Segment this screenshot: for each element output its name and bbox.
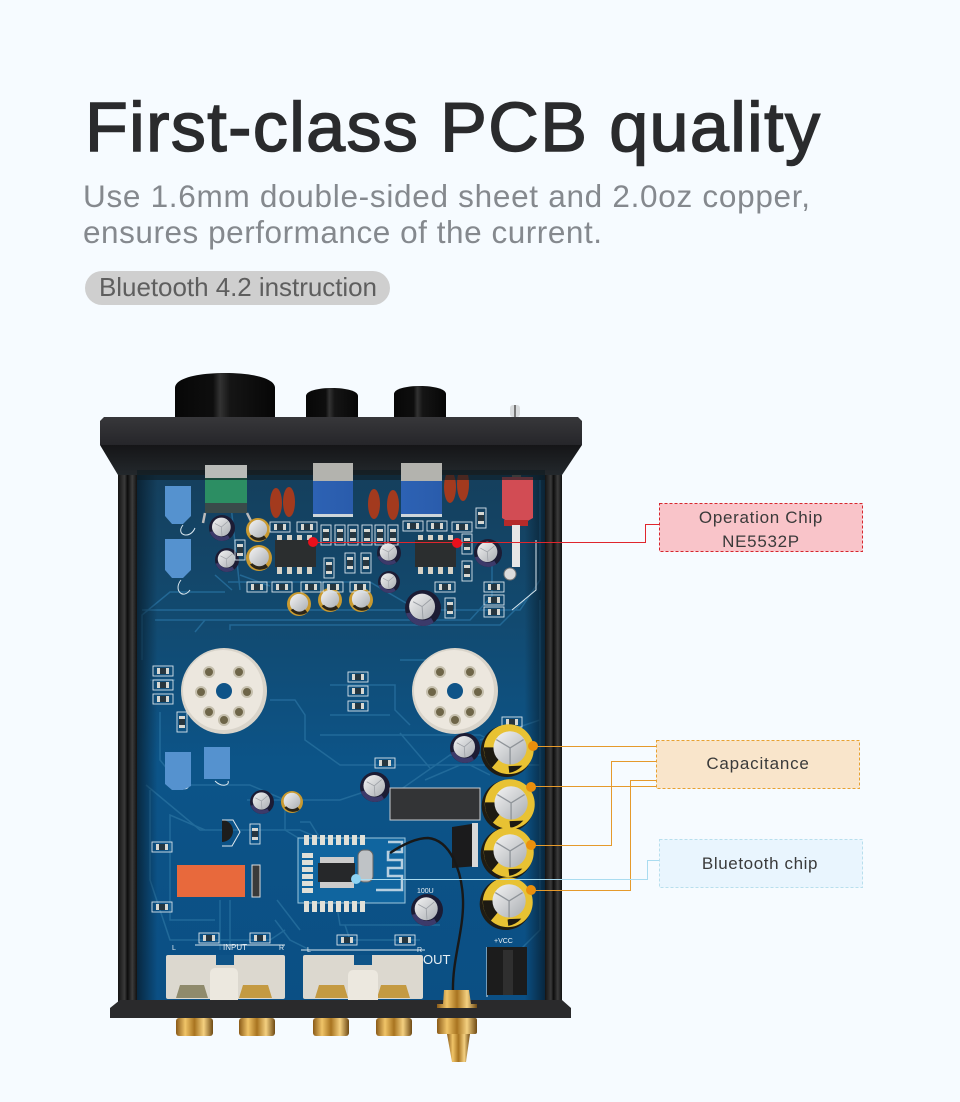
PCB silk labels: R: [417, 947, 422, 954]
bluetooth module: [298, 835, 405, 912]
PCB silk labels: L: [307, 947, 311, 954]
knobs: [175, 373, 520, 417]
label: Operation Chip NE5532P: [660, 504, 862, 552]
vacuum tube sockets: [181, 648, 498, 734]
red capacitors: [270, 464, 495, 520]
connector: op-amp chips to label: [308, 524, 660, 548]
PCB board: [137, 470, 545, 1005]
orange relay: [177, 865, 245, 897]
potentiometer tops over plate shadow: [205, 463, 442, 481]
black heat sink parts: [390, 788, 480, 868]
PCB silk labels: R: [279, 945, 284, 952]
bottom end plate with connectors: [110, 990, 571, 1062]
DC power jack: [487, 947, 527, 995]
PCB silk labels: 100U: [417, 888, 434, 895]
potentiometers: bass and treble (blue): [313, 463, 442, 517]
connector: bluetooth chip to label: [351, 860, 659, 884]
label: Capacitance: [656, 740, 860, 788]
enclosure side rails: [118, 445, 562, 1005]
small transistor and diode: [222, 820, 260, 897]
potentiometer: main volume (green): [203, 465, 252, 523]
label: Operation Chip NE5532P: NE5532P: [722, 532, 800, 551]
PCB silk labels: OUT: [423, 952, 450, 967]
NE5532P op-amp chips: [275, 535, 456, 574]
label: Operation Chip NE5532P: Operation Chip: [699, 508, 823, 527]
top end plate: [100, 417, 582, 480]
PCB silk labels: INPUT: [223, 943, 247, 952]
PCB edge shadow: [137, 470, 545, 1005]
subtitle: ensures performance of the current.: [83, 214, 602, 250]
subtitle: [83, 178, 810, 250]
title: First-class PCB quality: [85, 88, 820, 166]
pill badge: Bluetooth 4.2 instruction: Bluetooth 4.2 instruction: [99, 272, 377, 302]
label: Bluetooth chip: Bluetooth chip: [702, 854, 818, 873]
antenna cable: [390, 838, 463, 992]
copper traces: [142, 480, 540, 950]
PCB silk labels: [172, 888, 513, 967]
label: Bluetooth chip: [660, 840, 862, 888]
PCB silk labels: L: [172, 945, 176, 952]
PCB silk labels: +VCC: [494, 938, 513, 945]
label: Capacitance: Capacitance: [706, 754, 810, 773]
amplifier board photo illustration: [100, 373, 582, 1062]
SMD resistors: [152, 508, 522, 945]
blue film capacitors: [165, 486, 230, 790]
small electrolytic capacitors: [209, 515, 502, 926]
large yellow electrolytic capacitors: [480, 724, 535, 930]
toggle switch: [502, 463, 533, 580]
RCA socket blocks: [166, 955, 423, 1006]
silkscreen outlines: [175, 525, 536, 997]
subtitle: Use 1.6mm double-sided sheet and 2.0oz copper,: [83, 178, 810, 214]
connectors: capacitors to label: [526, 741, 656, 895]
